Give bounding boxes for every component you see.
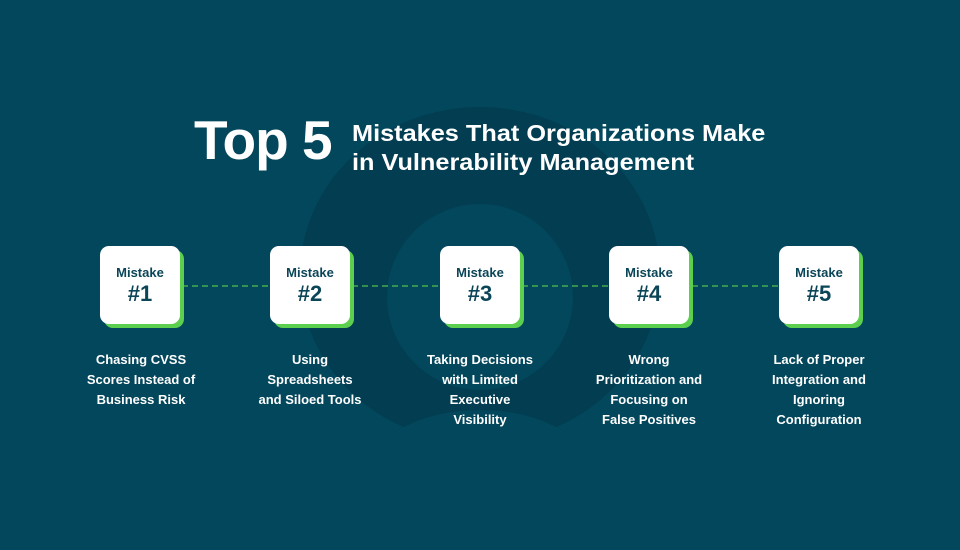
card: mistake 2 — [270, 246, 350, 324]
text: mistake 4: Wrong — [629, 352, 669, 367]
title — [194, 109, 765, 175]
card: mistake 4 — [609, 246, 689, 324]
text: mistake 3 — [427, 352, 533, 427]
text: mistake 3: Taking Decisions — [427, 352, 533, 367]
text: mistake 1: Business Risk — [97, 392, 185, 407]
text: mistake 5: Lack of Proper — [773, 352, 865, 367]
card: mistake 1: #1 — [128, 281, 152, 306]
card: mistake 5: Mistake — [795, 265, 843, 280]
card: mistake 4: Mistake — [625, 265, 673, 280]
text: mistake 5: Ignoring — [793, 392, 845, 407]
title: in Vulnerability Management — [352, 149, 694, 175]
text: mistake 1: Chasing CVSS — [96, 352, 186, 367]
text: mistake 5: Configuration — [776, 412, 862, 427]
text: mistake 4: False Positives — [602, 412, 696, 427]
card: mistake 2: #2 — [298, 281, 322, 306]
text: mistake 2: and Siloed Tools — [258, 392, 362, 407]
text: mistake 1: Scores Instead of — [87, 372, 195, 387]
card: mistake 1: Mistake — [116, 265, 164, 280]
text: mistake 2: Using — [292, 352, 328, 367]
card: mistake 5 — [779, 246, 859, 324]
text: mistake 4 — [596, 352, 702, 427]
text: mistake 3: with Limited — [442, 372, 518, 387]
card: mistake 2: Mistake — [286, 265, 334, 280]
card: mistake 3 — [440, 246, 520, 324]
text: mistake 3: Executive — [450, 392, 510, 407]
text: mistake 2 — [258, 352, 362, 407]
card: mistake 4: #4 — [637, 281, 661, 306]
card: mistake 3: Mistake — [456, 265, 504, 280]
title: Mistakes That Organizations Make — [352, 120, 765, 146]
text: mistake 1 — [87, 352, 196, 407]
text: mistake 5: Integration and — [772, 372, 866, 387]
text: mistake 5 — [772, 352, 866, 427]
card: mistake 1 — [100, 246, 180, 324]
title: Top 5 — [194, 109, 332, 171]
text: mistake 3: Visibility — [453, 412, 507, 427]
card: mistake 3: #3 — [468, 281, 492, 306]
text: mistake 4: Prioritization and — [596, 372, 702, 387]
card: mistake 5: #5 — [807, 281, 831, 306]
text: mistake 2: Spreadsheets — [267, 372, 353, 387]
text: mistake 4: Focusing on — [610, 392, 688, 407]
